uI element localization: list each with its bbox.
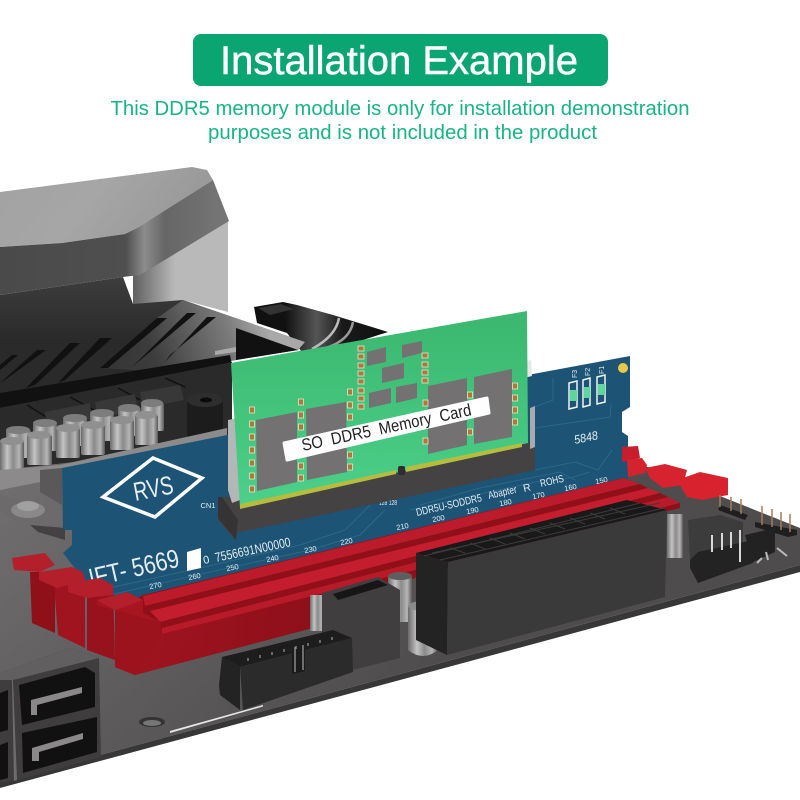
PCB traces — [100, 378, 612, 595]
PCB silkscreen labels: DDR5U-SODDR5 — [415, 492, 483, 519]
pin strips — [718, 495, 797, 537]
PCB silkscreen labels: 128 128 — [379, 500, 397, 507]
grey storage connector — [322, 577, 400, 672]
24-pin ATX power connector — [416, 500, 667, 655]
PCB silkscreen labels: 230 — [303, 544, 318, 555]
capacitors — [0, 399, 164, 471]
PCB silkscreen labels: 240 — [265, 553, 280, 564]
PCB silkscreen labels: 5848 — [573, 428, 599, 447]
yellow marker dot — [618, 363, 628, 373]
RVS logo: RVS — [131, 470, 176, 507]
fuses: F1 — [599, 366, 606, 374]
inductor cylinder — [187, 393, 223, 440]
grey electrolytic capacitor — [408, 601, 438, 656]
subtitle text: This DDR5 memory module is only for installation demonstration — [110, 97, 690, 120]
PCB silkscreen labels: R — [522, 481, 532, 495]
PCB silkscreen labels: 150 — [594, 475, 609, 486]
IDC pin header — [219, 630, 353, 710]
left slot latches — [12, 553, 115, 660]
PCB silkscreen labels: CN1 — [200, 501, 216, 510]
CPU retention bracket — [0, 428, 227, 540]
SO-DIMM memory module — [231, 311, 528, 509]
PCB silkscreen labels: 210 — [395, 521, 410, 532]
PCB silkscreen labels: 220 — [339, 536, 354, 547]
PCB silkscreen labels: ROHS — [539, 473, 565, 490]
notch — [398, 466, 405, 475]
power connector and cable behind heatsink — [254, 302, 388, 352]
heatsink fins — [0, 313, 298, 408]
title banner: Installation Example — [220, 39, 578, 83]
red memory slots — [97, 478, 680, 675]
subtitle text — [110, 97, 690, 144]
memory chips — [256, 341, 512, 491]
PCB silkscreen labels — [86, 428, 609, 593]
PCB silkscreen labels: 270 — [148, 580, 163, 591]
motherboard illustration — [0, 167, 800, 788]
right slot latches — [622, 446, 728, 500]
small surface-mount components — [250, 346, 518, 492]
memory socket — [218, 442, 535, 540]
fan header and right connectors — [688, 495, 797, 583]
fuses: F3 — [572, 370, 579, 378]
PCB silkscreen labels: 7556691N00000 — [214, 534, 292, 565]
fuses: F2 — [585, 368, 592, 376]
PCB silkscreen labels: Abapter — [487, 484, 518, 502]
PCB silkscreen labels: 260 — [187, 571, 202, 582]
SATA connectors — [0, 648, 101, 783]
gold contact fingers — [240, 470, 396, 509]
PCB silkscreen labels: IFT- 5669 — [86, 543, 182, 593]
socket latches — [228, 360, 535, 503]
fuses — [569, 366, 606, 409]
PCB silkscreen labels: 0 — [202, 554, 211, 567]
PCB silkscreen labels: 180 — [498, 497, 513, 508]
PCB silkscreen labels: 170 — [531, 490, 546, 501]
VRM blocks — [0, 362, 232, 470]
PCB silkscreen labels: 160 — [563, 482, 578, 493]
PCB silkscreen labels: 250 — [225, 562, 240, 573]
PCB silkscreen labels: 190 — [465, 505, 480, 516]
subtitle text: purposes and is not included in the product — [208, 121, 597, 144]
capacitors near connectors — [310, 514, 683, 631]
adapter PCB — [62, 356, 630, 600]
heatsink — [0, 167, 305, 408]
PCB silkscreen labels: 200 — [431, 513, 446, 524]
board plate — [0, 380, 800, 788]
module label: SO DDR5 Memory Card — [300, 400, 473, 455]
RVS logo — [103, 458, 202, 517]
